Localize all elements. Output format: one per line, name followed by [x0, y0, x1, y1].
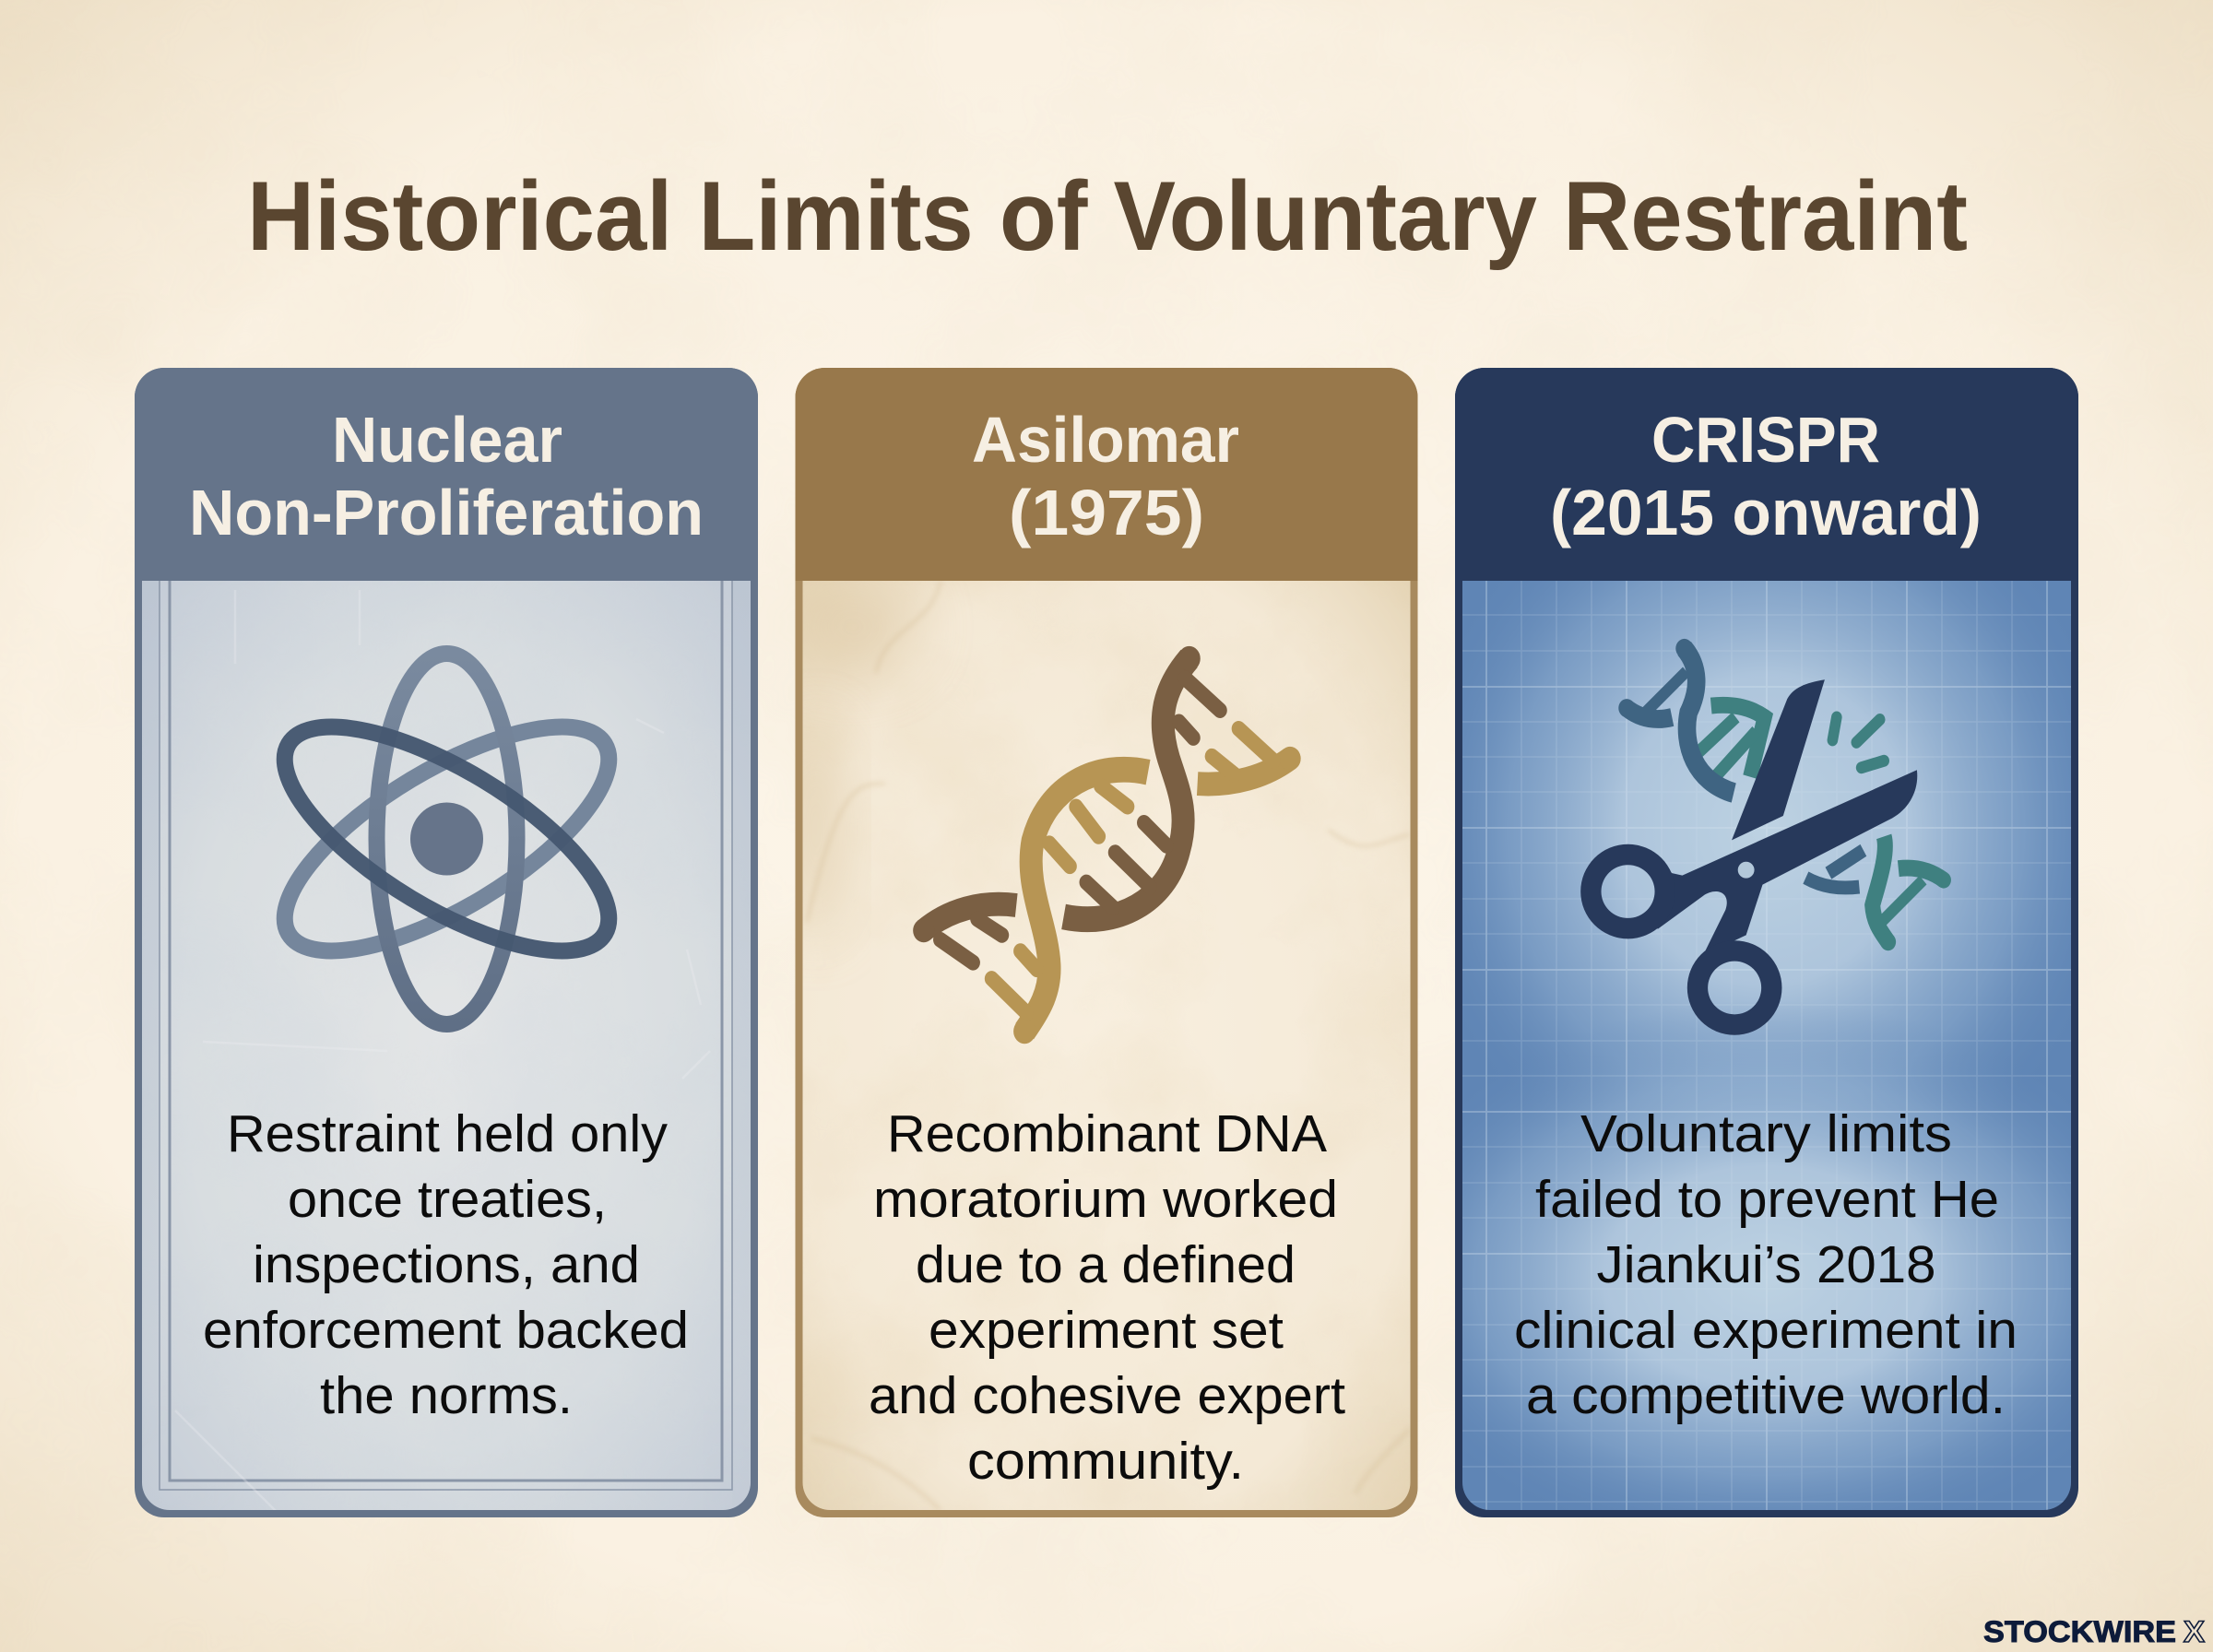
watermark: stockwire x: X — [2183, 1615, 2206, 1648]
header: crispr: (2015 onward) — [1550, 477, 1982, 549]
upper blade — [1732, 679, 1825, 840]
panel: crispr — [1455, 368, 2078, 1517]
card frame: nuclear — [135, 368, 758, 1517]
header: asilomar: Asilomar — [972, 404, 1239, 476]
header: crispr: CRISPR — [1651, 404, 1880, 476]
text: crispr description: clinical experiment in — [1514, 1301, 2018, 1360]
text: asilomar description: Recombinant DNA — [887, 1104, 1327, 1163]
pivot — [1738, 862, 1755, 879]
text: crispr description: a competitive world. — [1526, 1366, 2006, 1425]
watermark: stockwire x: STOCKWIRE — [1983, 1615, 2176, 1648]
text: asilomar description — [869, 1104, 1345, 1491]
header: asilomar — [795, 368, 1418, 581]
text: asilomar description: and cohesive expert — [869, 1366, 1345, 1425]
title: Historical Limits of Voluntary Restraint — [247, 160, 1968, 271]
text: crispr description — [1514, 1104, 2018, 1425]
icon: scissors cutting dna — [1580, 639, 1951, 1035]
header: crispr — [1455, 368, 2078, 581]
text: asilomar description: experiment set — [929, 1301, 1284, 1360]
icon: dna helix — [913, 646, 1301, 1044]
text: nuclear description: the norms. — [320, 1366, 573, 1425]
icon: atom — [253, 654, 641, 1024]
header: nuclear: Nuclear — [332, 404, 562, 476]
text: asilomar description: moratorium worked — [873, 1170, 1338, 1229]
header: nuclear — [135, 368, 758, 581]
panel body: crispr — [1462, 581, 2071, 1510]
header: nuclear: Non-Proliferation — [189, 477, 704, 549]
text: crispr description: Jiankui’s 2018 — [1597, 1235, 1936, 1294]
text: nuclear description: inspections, and — [253, 1235, 640, 1294]
panel: asilomar — [788, 368, 1418, 1517]
panel body: asilomar — [788, 576, 1411, 1510]
text: nuclear description: once treaties, — [288, 1170, 607, 1229]
strand: tan — [991, 728, 1301, 1044]
text: asilomar description: community. — [967, 1432, 1244, 1491]
cut dna strands — [1618, 639, 1951, 950]
text: crispr description: failed to prevent He — [1535, 1170, 1999, 1229]
card frame: crispr — [1455, 368, 2078, 1517]
header: asilomar: (1975) — [1009, 477, 1204, 549]
text: nuclear description — [203, 1104, 689, 1425]
text: asilomar description: due to a defined — [916, 1235, 1296, 1294]
panel body: nuclear — [142, 581, 751, 1512]
spark marks — [1832, 717, 1884, 768]
panel: nuclear non-proliferation — [135, 368, 758, 1517]
text: nuclear description: enforcement backed — [203, 1301, 689, 1360]
strand: brown — [913, 646, 1220, 962]
text: nuclear description: Restraint held only — [227, 1104, 668, 1163]
text: crispr description: Voluntary limits — [1580, 1104, 1952, 1163]
scissor body and handles — [1658, 770, 1917, 956]
card frame: asilomar — [795, 368, 1418, 1517]
